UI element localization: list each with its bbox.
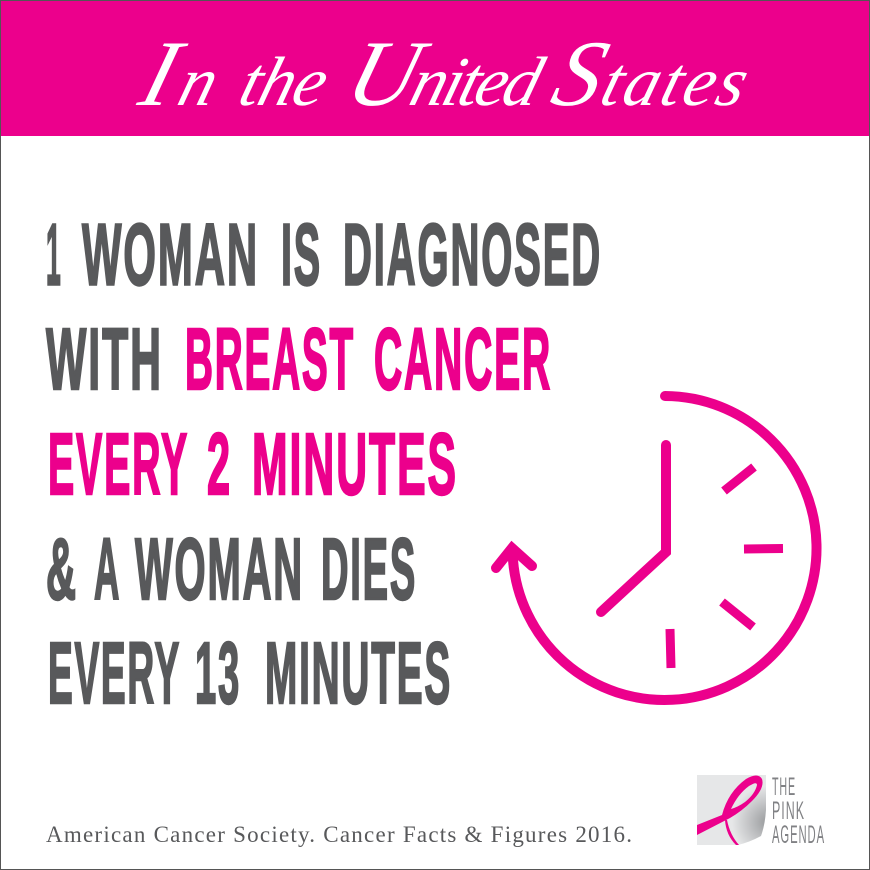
icon: pink ribbon bbox=[697, 776, 763, 845]
logo: The Pink Agenda bbox=[697, 773, 825, 849]
logo wordmark bbox=[772, 773, 825, 849]
logo square with page curl bbox=[697, 775, 766, 845]
main statement text: CANCER bbox=[374, 311, 552, 408]
hour ticks bbox=[670, 467, 783, 668]
header banner bbox=[0, 0, 870, 136]
source citation: American Cancer Society. Cancer Facts & Figures 2016. bbox=[46, 822, 632, 847]
arrow head bbox=[496, 548, 532, 568]
banner title: In bbox=[129, 22, 234, 126]
main statement text: WITH bbox=[46, 311, 163, 408]
main statement text bbox=[46, 206, 602, 722]
main statement text: IS bbox=[281, 206, 322, 304]
main statement text: 1 bbox=[46, 206, 62, 304]
main statement text: A bbox=[94, 521, 121, 618]
main statement text: BREAST bbox=[185, 311, 355, 408]
main statement text: 13 bbox=[195, 625, 241, 722]
main statement text: WOMAN bbox=[82, 206, 259, 304]
banner title: the bbox=[232, 43, 338, 121]
main statement text: EVERY bbox=[48, 416, 189, 513]
icon: clock with counter-clockwise arrow bbox=[496, 396, 817, 700]
main statement text: & bbox=[46, 521, 78, 618]
main statement text: 2 bbox=[207, 416, 232, 513]
banner title: United bbox=[336, 22, 558, 126]
main statement text: MINUTES bbox=[252, 416, 458, 513]
clock circular arrow bbox=[513, 396, 817, 700]
banner title: States bbox=[542, 22, 764, 126]
logo wordmark: THE bbox=[772, 773, 796, 801]
banner title bbox=[129, 22, 764, 126]
main statement text: EVERY bbox=[48, 625, 181, 722]
clock hands bbox=[601, 445, 666, 612]
main statement text: WOMAN bbox=[135, 521, 304, 618]
main statement text: DIES bbox=[321, 521, 417, 618]
logo wordmark: PINK bbox=[772, 797, 805, 825]
main statement text: MINUTES bbox=[265, 625, 452, 722]
